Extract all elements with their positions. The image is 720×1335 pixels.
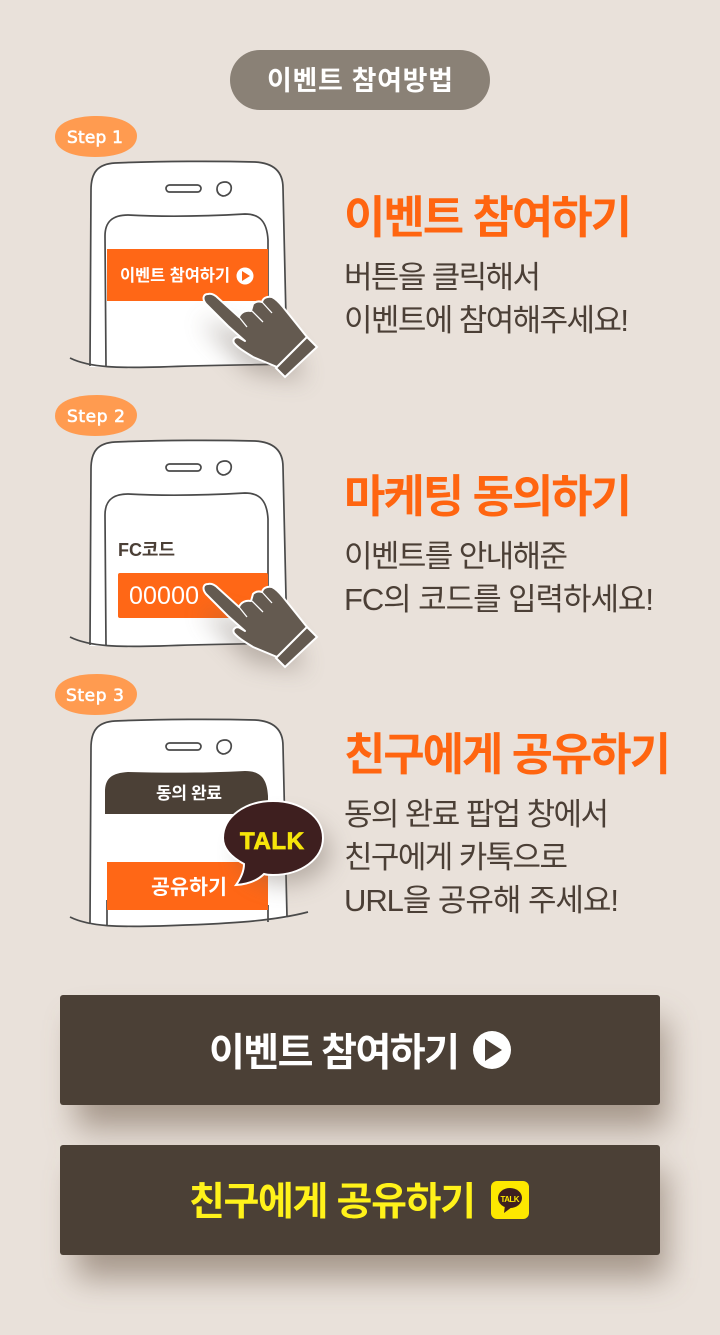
step 3 description: 친구에게 카톡으로 (344, 840, 568, 875)
panel: step 2 (55, 395, 317, 670)
step 1 description: 이벤트에 참여해주세요! (344, 303, 629, 338)
step 2 description: FC의 코드를 입력하세요! (344, 582, 654, 617)
title pill (230, 50, 490, 110)
step 2 FC code label: FC코드 (118, 540, 175, 560)
icon: kakao talk (491, 1181, 529, 1219)
step 3 description: 동의 완료 팝업 창에서 (344, 797, 609, 832)
step 3 description: URL을 공유해 주세요! (344, 883, 619, 918)
step 2 heading: 마케팅 동의하기 (344, 471, 632, 522)
step 1 badge: Step 1 (67, 128, 123, 148)
step 3 talk bubble (223, 801, 330, 885)
step 1 description (344, 260, 629, 338)
button: share with friends: 친구에게 공유하기 (189, 1181, 476, 1224)
step 3 popup header (105, 771, 268, 814)
step 3 phone (70, 719, 308, 926)
shadow: buttons (76, 1020, 666, 1278)
step 1 orange button: 이벤트 참여하기 (120, 266, 230, 285)
step 3 heading: 친구에게 공유하기 (344, 729, 671, 780)
step 3 share button: 공유하기 (151, 876, 227, 899)
button: join event: 이벤트 참여하기 (209, 1032, 460, 1075)
step 2 description (344, 539, 654, 617)
step 1 heading: 이벤트 참여하기 (344, 192, 632, 243)
panel: step 1 (55, 116, 317, 380)
icon: kakao talk: TALK (500, 1195, 520, 1204)
step 2 input field (118, 573, 268, 618)
step 3 talk bubble: TALK (240, 828, 305, 855)
button: share with friends (60, 1145, 660, 1255)
step 3 description (344, 797, 619, 918)
panel: step 3 (55, 674, 330, 926)
step 2 input field: 00000 (129, 582, 199, 610)
step 1 description: 버튼을 클릭해서 (344, 260, 541, 295)
step 2 hand (200, 584, 317, 670)
step 2 badge: Step 2 (67, 407, 125, 427)
step 3 badge (55, 674, 137, 715)
step 3 share button (107, 862, 268, 910)
step 3 popup header: 동의 완료 (156, 784, 222, 803)
step 1 hand (200, 294, 317, 380)
step 1 badge (55, 116, 137, 157)
icon: play (473, 1031, 511, 1069)
title pill: 이벤트 참여방법 (267, 66, 453, 96)
step 1 phone (70, 161, 290, 367)
step 1 orange button (107, 249, 268, 301)
step 2 phone (70, 440, 290, 646)
button: join event (60, 995, 660, 1105)
step 2 badge (55, 395, 137, 436)
step 3 badge: Step 3 (66, 686, 124, 706)
step 2 description: 이벤트를 안내해준 (344, 539, 568, 574)
